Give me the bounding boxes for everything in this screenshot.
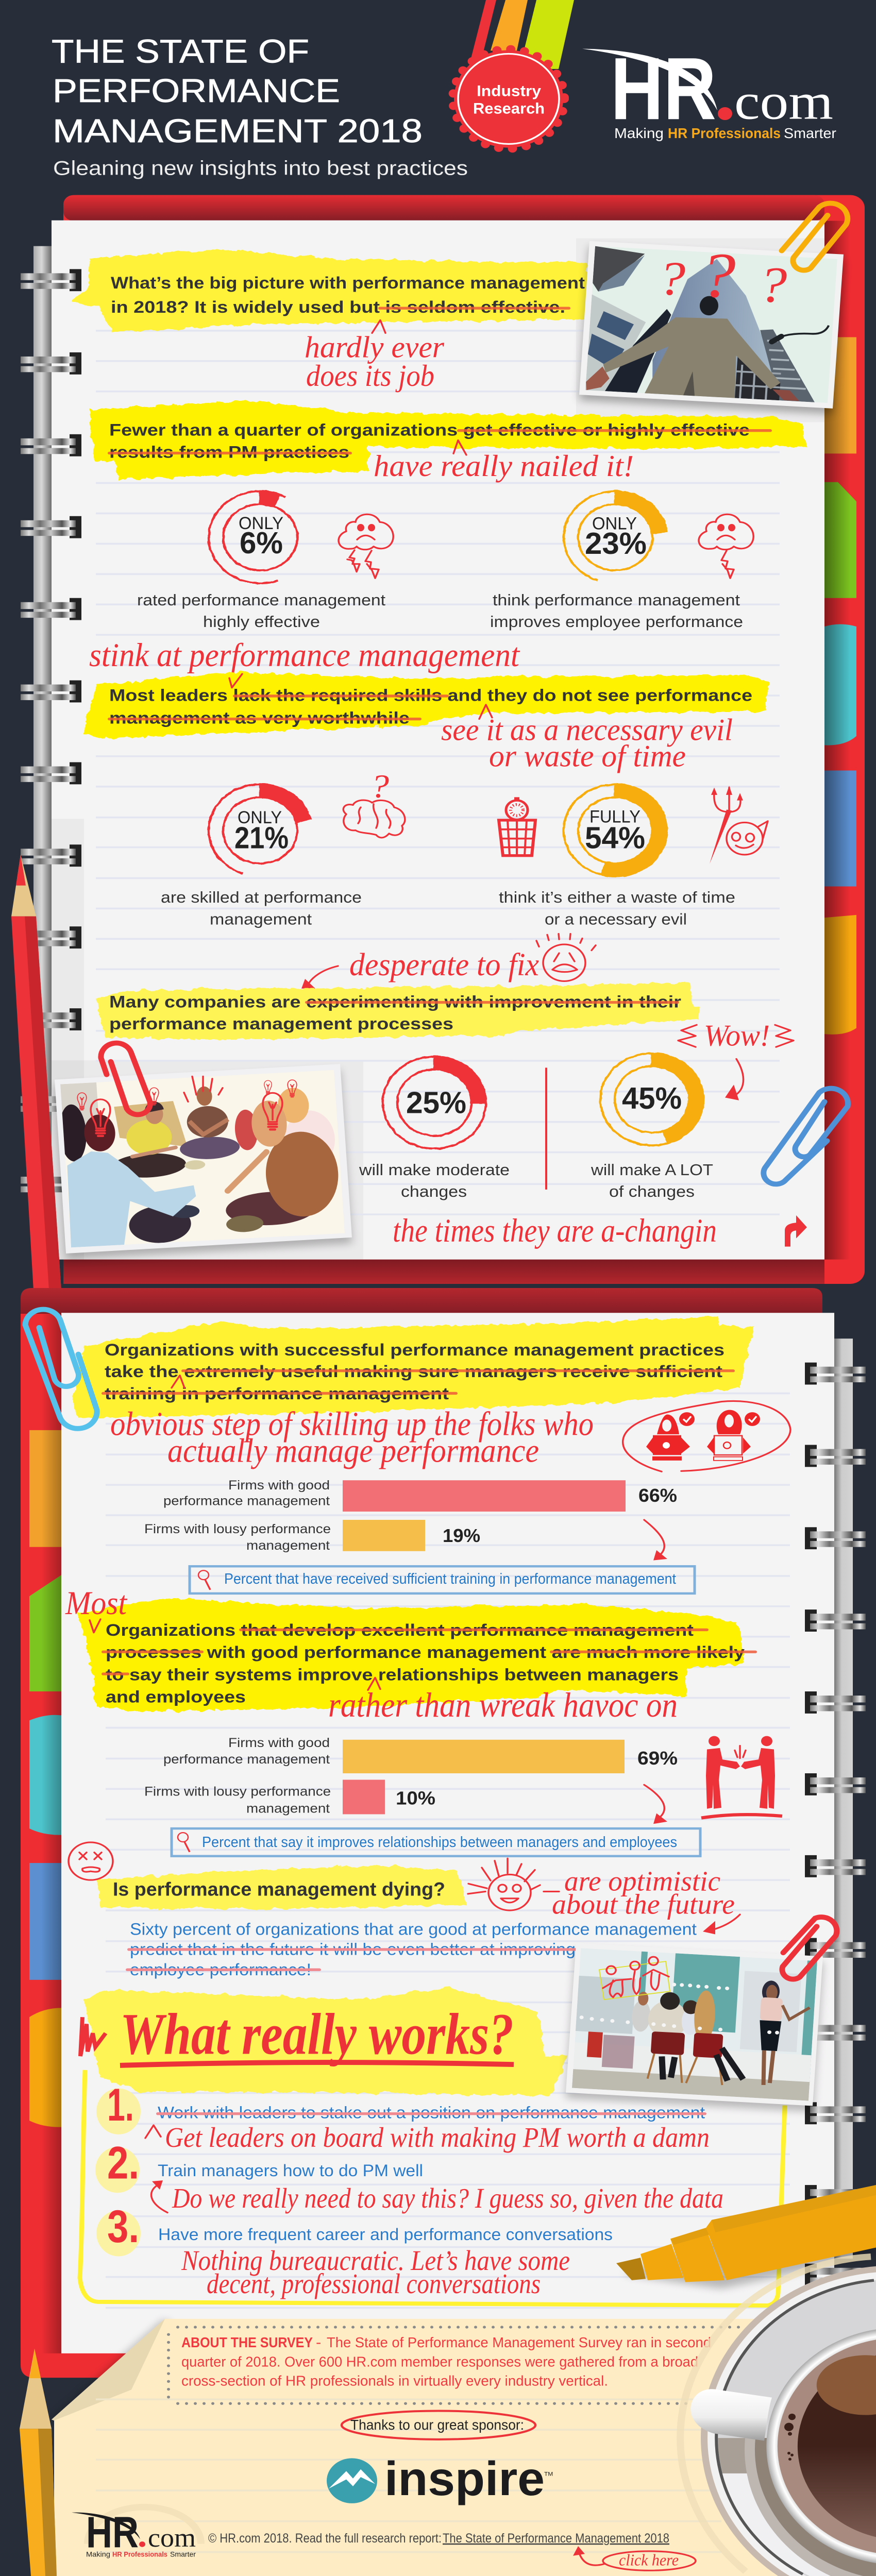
heading text: results from PM practices — [109, 443, 349, 462]
tabs right — [824, 221, 856, 1260]
donut text: 6% — [239, 513, 283, 560]
logo: HR.com — [582, 39, 836, 141]
icon: turn arrow — [785, 1215, 807, 1247]
logo: inspire: TM — [544, 2471, 553, 2477]
donut: 54% — [564, 784, 667, 876]
paperclip red — [101, 1043, 150, 1114]
icon: handshake — [701, 1736, 782, 1818]
caption — [490, 591, 743, 631]
heading text — [111, 274, 585, 317]
caption: management — [210, 910, 312, 928]
heading text — [105, 1341, 725, 1403]
paperclip orange — [782, 203, 848, 270]
binder rings 2 — [805, 1363, 866, 2286]
heading text: processes with good performance management are much more likely — [106, 1643, 745, 1662]
heading text: Organizations that develop excellent performance management — [106, 1621, 694, 1640]
about the survey: The State of Performance Management Survey ran in second — [327, 2335, 711, 2351]
donut text: 54% — [585, 806, 645, 855]
handwritten note — [110, 1376, 594, 1470]
wow note — [678, 1019, 794, 1100]
bar chart: training: performance management — [163, 1494, 330, 1508]
handwritten note: actually manage performance — [167, 1432, 539, 1470]
caret notes: or waste of time — [489, 739, 686, 773]
bar chart: training — [144, 1478, 677, 1553]
item 3: 3. — [107, 2201, 139, 2252]
icons: light bulbs — [77, 1076, 297, 1136]
highlight — [72, 249, 587, 332]
footer text — [208, 2531, 669, 2545]
item 1: Work with leaders to stake out a position on performance management — [158, 2104, 705, 2122]
paperclip light blue — [25, 1310, 97, 1429]
marker — [616, 2185, 876, 2289]
handwritten note: have really nailed it! — [374, 449, 634, 483]
about the survey: ABOUT THE SURVEY — [181, 2335, 313, 2351]
section: is PM dying — [69, 1842, 740, 1979]
bar chart: training: 66% — [638, 1486, 677, 1506]
item 2: Do we really need to say this? I guess so, given the data — [172, 2182, 723, 2214]
bar chart: relationships — [144, 1735, 678, 1816]
title: THE STATE OF — [52, 33, 309, 70]
handwritten: Most: Most — [65, 1585, 128, 1621]
handwritten note: does its job — [306, 359, 434, 393]
heading text: and employees — [106, 1688, 246, 1706]
about the survey: cross-section of HR professionals in virtually every industry vertical. — [181, 2373, 608, 2389]
bar chart: relationships: 10% — [396, 1789, 435, 1809]
caption: think performance management — [493, 591, 740, 609]
arrow — [644, 1520, 667, 1561]
pencil orange — [20, 2349, 57, 2576]
heading text: Many companies are experimenting with improvement in their — [109, 993, 681, 1011]
logo: HR.com small: HR — [86, 2508, 139, 2557]
bar chart: training: management — [246, 1538, 330, 1553]
highlight — [84, 1987, 567, 2096]
wow note: Wow! — [704, 1019, 770, 1053]
bar: 19% — [343, 1520, 425, 1551]
section: experimenting — [95, 934, 700, 1040]
item 1: Get leaders on board with making PM worth a damn — [165, 2122, 710, 2153]
photo: meeting room — [566, 1943, 823, 2111]
title: PERFORMANCE — [53, 73, 340, 109]
donut text: 21%: ONLY — [238, 807, 282, 827]
caption — [499, 888, 735, 928]
caption: of changes — [609, 1183, 695, 1200]
question marks: ? — [659, 251, 685, 305]
logo: HR.com: HR Professionals — [668, 125, 781, 141]
highlight — [95, 982, 700, 1040]
donut text: 54%: FULLY — [589, 806, 641, 826]
handwritten note: about the future — [552, 1888, 735, 1920]
donut text: 45%: 45% — [622, 1081, 682, 1115]
icon: devil and trident — [710, 786, 768, 864]
item 3: Nothing bureaucratic. Let’s have some — [181, 2245, 570, 2276]
about the survey — [181, 2335, 711, 2389]
caption: changes — [401, 1183, 467, 1200]
caption: are skilled at performance — [161, 888, 362, 906]
handwritten note: hardly ever — [305, 330, 445, 364]
body text: employee performance! — [130, 1961, 311, 1979]
handwritten note: are optimistic — [564, 1866, 720, 1897]
heading text — [109, 686, 752, 727]
body text: Sixty percent of organizations that are good at performance management — [130, 1920, 697, 1939]
subtitle: Gleaning new insights into best practices — [53, 156, 468, 179]
section: most leaders — [84, 636, 768, 773]
donut text: 23%: 23% — [585, 527, 647, 561]
legend box: Percent that say it improves relationships between managers and employees — [202, 1834, 677, 1850]
heading text: Most leaders lack the required skills and they do not see performance — [109, 686, 752, 705]
highlight — [89, 400, 807, 479]
caption: or a necessary evil — [545, 910, 687, 928]
heading text: management as very worthwhile — [109, 709, 410, 727]
highlight — [96, 1866, 466, 1909]
heading text — [109, 993, 681, 1033]
bar chart: relationships: 69% — [637, 1749, 678, 1769]
legend box: Percent that have received sufficient training in performance management — [224, 1571, 677, 1587]
title: MANAGEMENT 2018 — [53, 112, 423, 149]
logo: HR.com small: com — [148, 2523, 196, 2552]
logo: HR.com small: HR Professionals — [112, 2550, 167, 2558]
caption — [359, 1161, 510, 1200]
icon: anxious face — [536, 934, 596, 981]
ribbons — [469, 0, 574, 69]
click here: click here — [619, 2551, 679, 2569]
item 3 — [96, 2201, 613, 2299]
handwritten: times changing: the times they are a-changin — [393, 1212, 717, 1249]
highlight — [73, 1316, 754, 1418]
logo: HR.com small: Making — [86, 2550, 110, 2558]
body text: predict that in the future it will be even better at improving — [130, 1940, 576, 1959]
binder strip 1 — [33, 246, 52, 1244]
caption: think it’s either a waste of time — [499, 888, 735, 906]
icon: managers with laptops — [623, 1401, 790, 1471]
item 3: Have more frequent career and performance conversations — [158, 2226, 613, 2244]
notebook cover 1 — [63, 195, 865, 1284]
handwritten note — [301, 947, 539, 989]
footer text: © HR.com 2018. Read the full research report: — [208, 2531, 442, 2545]
donut text: 23% — [585, 514, 647, 561]
item 2: Train managers how to do PM well — [158, 2162, 423, 2180]
handwritten: Most — [65, 1585, 128, 1633]
heading text — [106, 1621, 745, 1706]
about the survey: - — [316, 2335, 321, 2351]
heading text: Fewer than a quarter of organizations get effective or highly effective — [109, 421, 750, 439]
photo: team sitting on floor — [55, 1064, 352, 1260]
legend box — [172, 1828, 700, 1856]
yellow note — [52, 2319, 778, 2576]
heading text — [109, 421, 750, 462]
bar chart: training: Firms with good — [228, 1478, 330, 1493]
donut: 25% — [383, 1057, 486, 1148]
question marks: ? — [759, 257, 787, 313]
highlight — [84, 672, 768, 738]
caption — [161, 888, 362, 928]
icon: clock in trash can — [499, 797, 535, 856]
list of recommendations — [95, 2079, 723, 2299]
logo: HR.com small — [72, 2508, 196, 2558]
bar chart: training: 19% — [443, 1526, 480, 1546]
bar: 66% — [343, 1480, 626, 1512]
caret notes: see it as a necessary evil — [441, 713, 733, 747]
bar chart: training: Firms with lousy performance — [144, 1521, 331, 1536]
paper page 2 — [61, 1313, 834, 2353]
click here — [573, 2546, 696, 2570]
badge: Industry Research: Research — [473, 100, 545, 117]
donut text: 23%: ONLY — [592, 514, 637, 533]
caption: highly effective — [203, 613, 320, 631]
item 2: 2. — [107, 2138, 139, 2189]
section: big picture — [72, 249, 587, 393]
handwritten note — [328, 1677, 678, 1724]
caption: rated performance management — [137, 591, 385, 609]
donut: 6% — [194, 478, 326, 596]
photo: man and skyscrapers — [579, 240, 844, 414]
body text — [130, 1920, 697, 1979]
caption — [591, 1161, 713, 1200]
bar chart: relationships: performance management — [163, 1752, 330, 1767]
icon: storm cloud — [339, 514, 393, 578]
logo: HR.com: Smarter — [784, 125, 836, 141]
paper page 1 — [52, 221, 824, 1260]
logo: HR.com: com — [734, 73, 833, 130]
item 1: 1. — [107, 2079, 134, 2131]
caption — [137, 591, 385, 631]
donut text: 21%: 21% — [234, 821, 289, 855]
heading: What really works? — [120, 2002, 514, 2067]
question marks — [659, 240, 787, 313]
item 1 — [96, 2079, 710, 2153]
donut text: 54%: 54% — [585, 821, 645, 855]
logo: HR.com small: Smarter — [170, 2550, 196, 2558]
icon: paper people — [599, 1957, 670, 1999]
heading text: What’s the big picture with performance management — [111, 274, 585, 292]
section: what really works — [80, 1987, 785, 2306]
icon: brain — [343, 768, 405, 838]
logo: HR.com: HR — [611, 39, 716, 138]
tabs left — [29, 1314, 61, 2353]
sponsor label — [342, 2411, 535, 2439]
donut text: 25%: 25% — [406, 1086, 466, 1120]
handwritten note — [552, 1866, 740, 1934]
heading text: training in performance management — [105, 1385, 449, 1403]
section: fewer than a quarter — [89, 400, 807, 483]
donut: 23% — [549, 478, 681, 596]
heading text: take the extremely useful making sure managers receive sufficient — [105, 1363, 722, 1381]
handwritten note: rather than wreak havoc on — [328, 1686, 678, 1724]
icon: storm cloud 2 — [699, 514, 753, 578]
badge: Industry Research: Industry — [477, 82, 542, 99]
divider — [545, 1067, 547, 1190]
heading text: performance management processes — [109, 1015, 453, 1033]
caption: improves employee performance — [490, 613, 743, 631]
donut text: 6%: ONLY — [239, 513, 283, 533]
section: relationships — [65, 1585, 755, 1724]
handwritten note: stink at performance management — [89, 636, 520, 673]
paperclip red 2 — [782, 1917, 837, 1979]
item 2 — [95, 2138, 723, 2214]
donut text: 6%: 6% — [240, 526, 283, 560]
handwritten note: desperate to fix — [349, 947, 539, 982]
handwritten note — [305, 320, 445, 393]
binder strip 2 — [834, 1338, 853, 2259]
heading text: Organizations with successful performance management practices — [105, 1341, 725, 1360]
heading text: in 2018? It is widely used but is seldom effective. — [111, 298, 565, 317]
coffee cup — [680, 2257, 876, 2576]
logo: inspire: inspire — [384, 2452, 545, 2505]
icon: brain: ? — [370, 768, 389, 804]
binder rings 1 — [21, 269, 81, 1195]
question marks: ? — [700, 240, 736, 311]
bar: 10% — [343, 1780, 385, 1814]
yellow frame — [80, 2070, 785, 2306]
bar chart: relationships: Firms with good — [228, 1735, 330, 1750]
bar: 69% — [343, 1740, 625, 1773]
arrow — [644, 1785, 667, 1824]
highlight — [78, 1598, 743, 1711]
title — [52, 33, 423, 149]
paperclip blue — [764, 1089, 848, 1184]
notebook cover 2 — [21, 1288, 822, 2378]
icon: happy face — [468, 1858, 559, 1910]
bar chart: relationships: Firms with lousy performance — [144, 1784, 331, 1799]
sponsor label: Thanks to our great sponsor: — [350, 2417, 524, 2433]
caption: will make moderate — [359, 1161, 510, 1179]
badge: Industry Research — [453, 49, 564, 148]
donut text: 21% — [234, 807, 289, 855]
bar chart: relationships: management — [246, 1801, 330, 1816]
item 3: decent, professional conversations — [207, 2268, 541, 2299]
dotted border — [169, 2327, 747, 2403]
donut: 21% — [194, 771, 326, 889]
donut: 45% — [600, 1054, 703, 1145]
heading text: to say their systems improve relationships between managers — [106, 1666, 679, 1684]
about the survey: quarter of 2018. Over 600 HR.com member responses were gathered from a broad — [181, 2354, 698, 2370]
handwritten note: obvious step of skilling up the folks who — [110, 1405, 594, 1443]
heading text: Is performance management dying? — [113, 1878, 445, 1900]
logo: HR.com: Making — [614, 125, 664, 141]
legend box — [190, 1566, 695, 1594]
heading — [80, 2002, 514, 2067]
pencil red — [11, 855, 61, 1290]
caret notes — [229, 674, 733, 773]
section: training — [73, 1316, 754, 1470]
caption: will make A LOT — [591, 1161, 713, 1179]
footer text: The State of Performance Management 2018 — [443, 2531, 669, 2545]
icon: dead face — [69, 1842, 113, 1880]
